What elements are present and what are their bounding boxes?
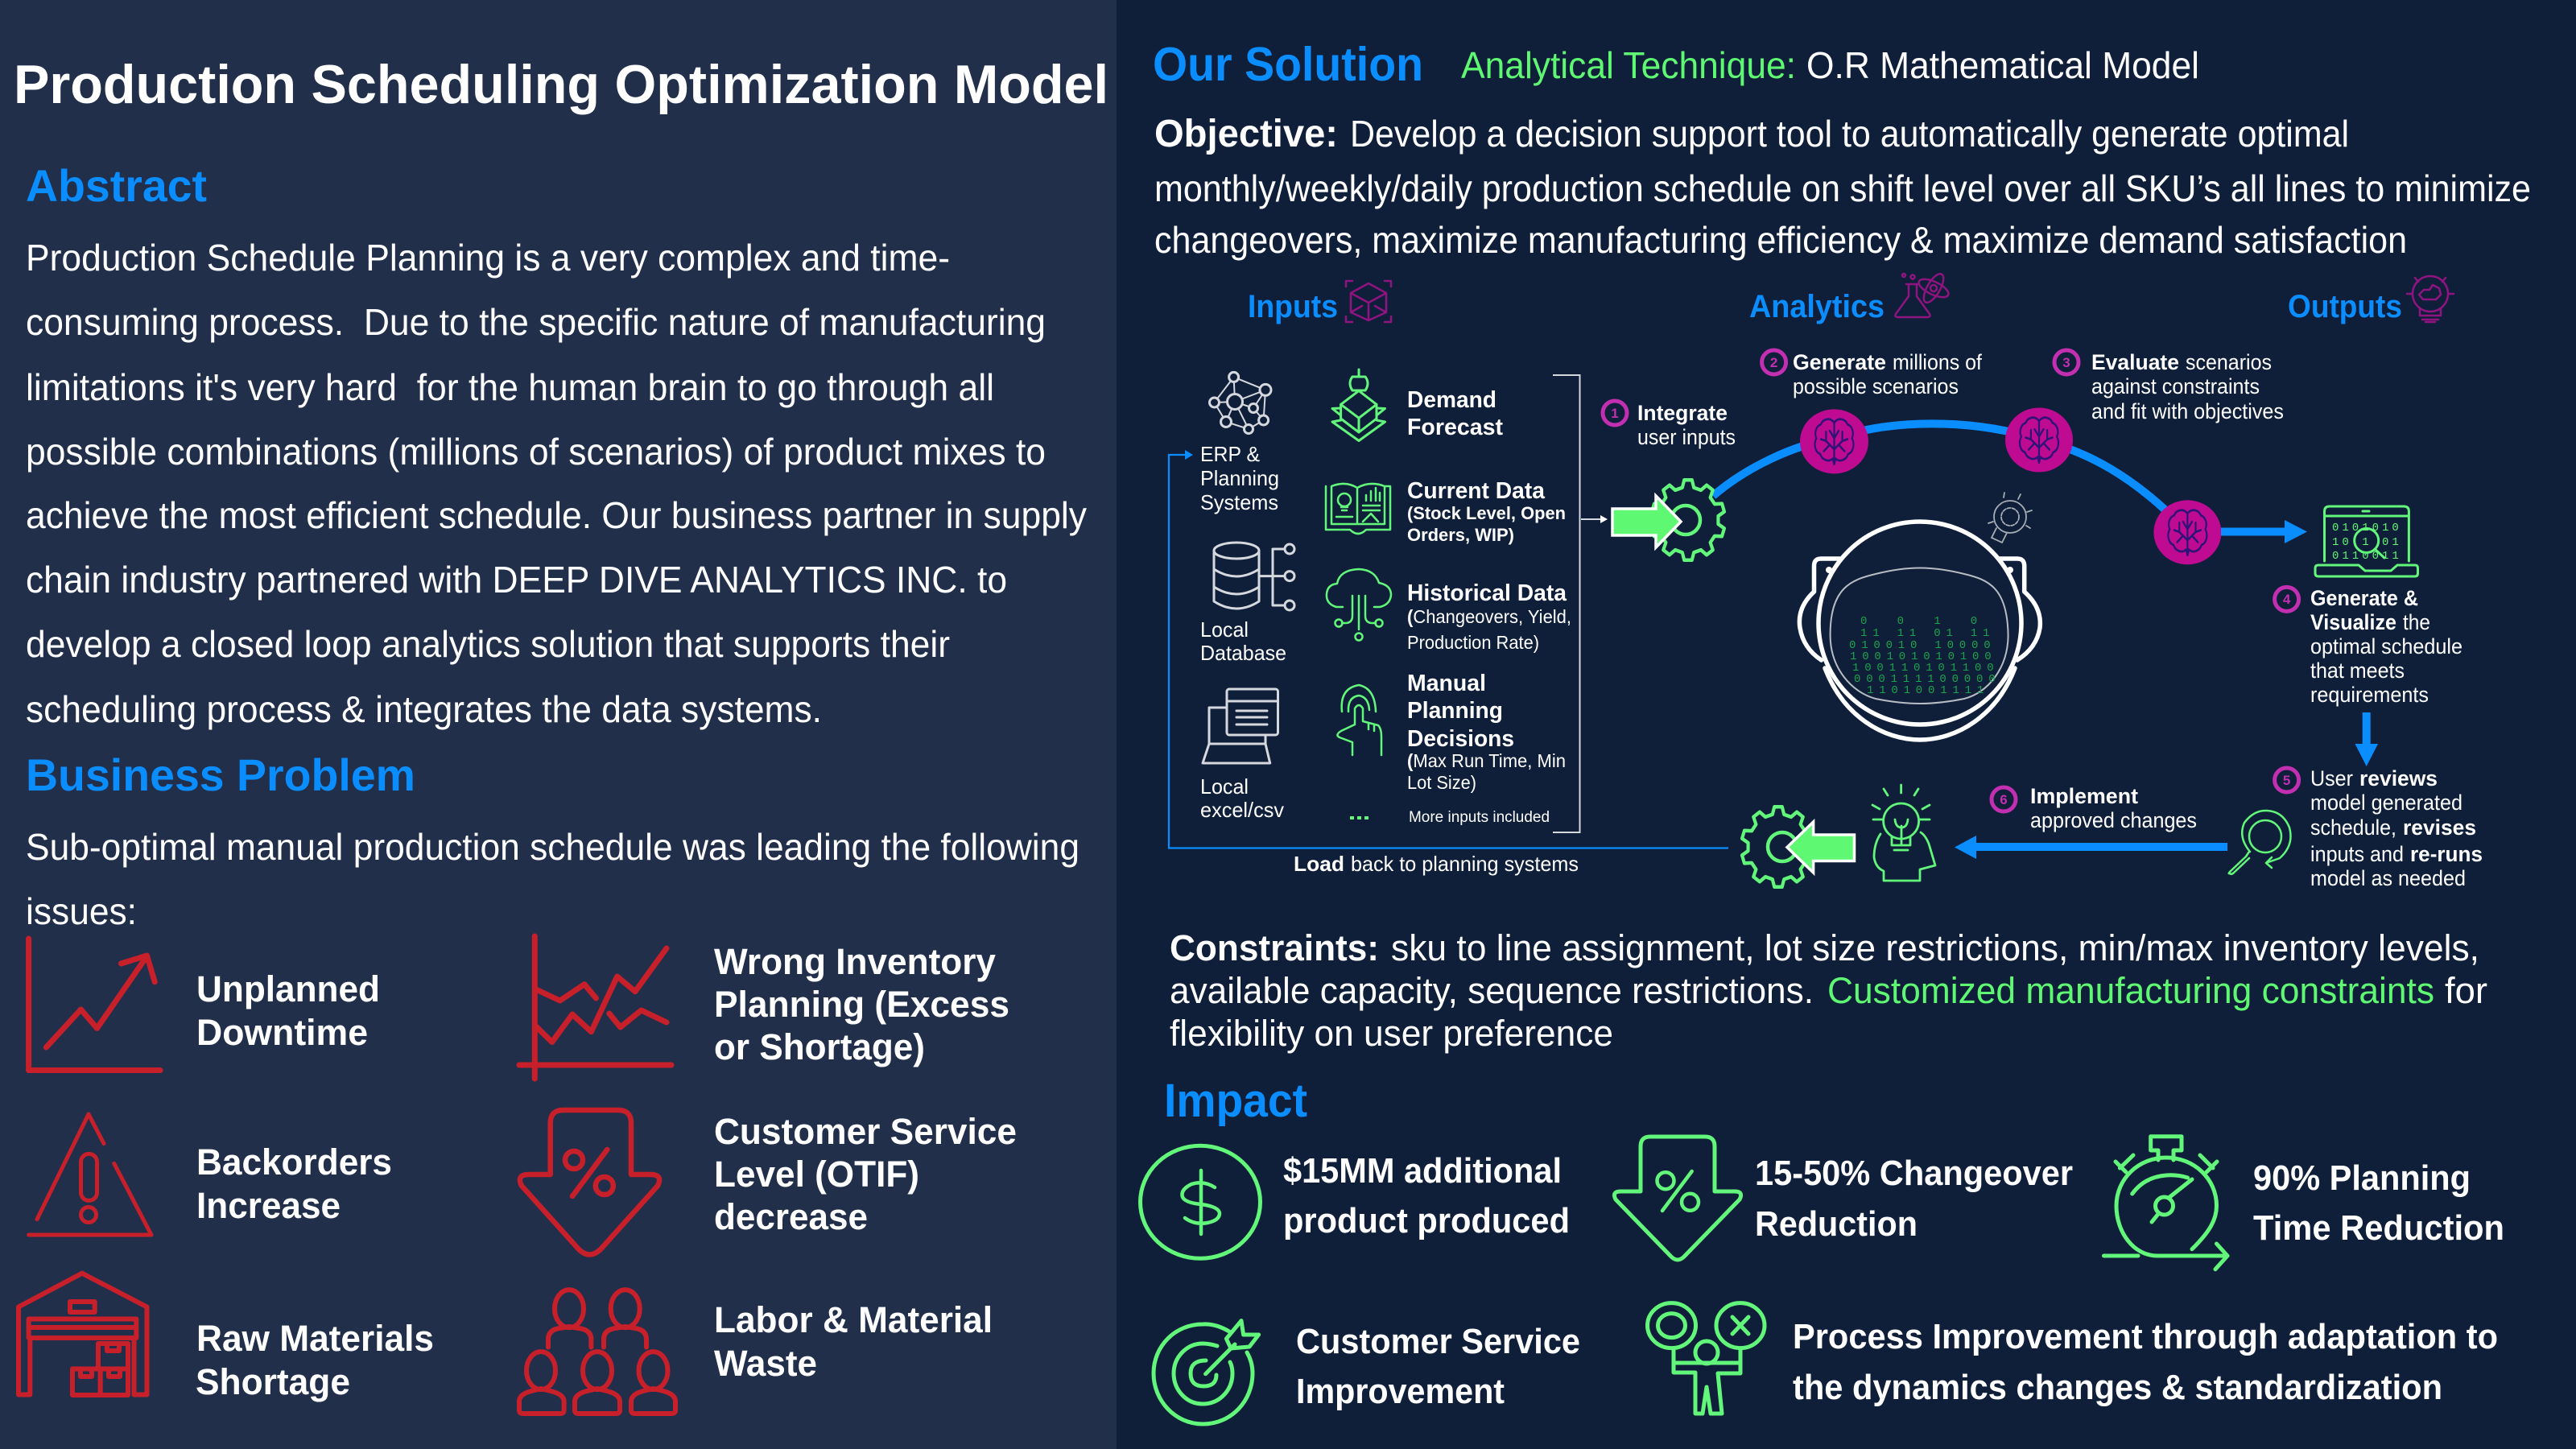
text: ERP and Planning Systems — [1200, 442, 1279, 514]
text: Current Data: (Stock Level, Open — [1407, 503, 1566, 523]
icon: more dots — [1350, 816, 1368, 819]
icon: laptop with binary: 0101010 — [2332, 522, 2402, 535]
step 2: generate: possible scenarios — [1793, 374, 1959, 398]
icon: percent down arrow — [520, 1110, 659, 1254]
arrow: down to review — [2355, 712, 2378, 766]
heading: Abstract: Abstract — [26, 160, 207, 211]
step 5: user reviews: User — [2310, 766, 2353, 791]
text: planning time reduction — [2253, 1158, 2504, 1248]
icon: magnifier loop — [2229, 811, 2291, 874]
step 4: generate and visualize: 4 — [2283, 592, 2291, 607]
step 6: implement — [1992, 784, 2197, 832]
label: Backorders Increase — [196, 1141, 392, 1226]
text: changeover reduction: 15-50% Changeover — [1755, 1154, 2073, 1193]
icon: dollar circle — [1140, 1146, 1261, 1258]
text: Historical Data — [1407, 580, 1571, 653]
step 2: generate: 2 — [1770, 355, 1777, 370]
icon: input gear with arrow — [1612, 470, 1734, 570]
binary stream: 100110101100 — [1852, 662, 1999, 675]
text: Local excel/csv — [1200, 774, 1284, 822]
icon: people group — [519, 1290, 675, 1414]
text: process improvement: Process Improvement through adaptation to — [1793, 1317, 2498, 1356]
binary stream: 000111100000 — [1854, 673, 2000, 686]
text: Demand Forecast: Demand — [1407, 387, 1496, 413]
text block: business problem intro — [26, 826, 1080, 932]
text block: objective: Develop a decision support tool to automatically generate optimal — [1350, 113, 2349, 155]
step 2: generate: millions of — [1893, 350, 1982, 374]
text: analytical technique: Analytical Technique: — [1461, 44, 1796, 86]
icon: stacked boxes forecast — [1332, 369, 1385, 441]
icon: database — [1214, 543, 1294, 610]
binary stream: 1101001111 — [1867, 684, 1989, 697]
label: Labor and Material Waste — [714, 1299, 993, 1384]
label: Raw Materials Shortage: Raw Materials — [196, 1318, 434, 1359]
text: Local Database: Local — [1200, 617, 1249, 642]
text: ERP and Planning Systems: Systems — [1200, 490, 1278, 514]
step 1: integrate — [1603, 401, 1736, 449]
text block: abstract body: chain industry partnered with DEEP DIVE ANALYTICS INC. to — [26, 559, 1007, 601]
text block: constraints: flexibility on user preference — [1170, 1013, 1613, 1054]
label: Labor and Material Waste: Waste — [714, 1343, 817, 1384]
icon: network — [1209, 372, 1271, 433]
bracket with arrow — [1553, 375, 1608, 832]
heading: Inputs: Inputs — [1248, 289, 1338, 324]
text: customer service improvement — [1296, 1322, 1580, 1411]
icon: bulb head — [1872, 785, 1935, 881]
title: Production Scheduling Optimization Model — [14, 54, 1108, 115]
step 4: generate and visualize: that meets — [2310, 658, 2405, 683]
binary stream — [1849, 615, 2000, 697]
label: Customer Service Level: decrease — [714, 1196, 868, 1237]
label: Unplanned Downtime: Downtime — [196, 1012, 368, 1053]
icon: output gear with arrow — [1732, 797, 1855, 897]
text block: constraints — [1170, 927, 2487, 1054]
step 3: evaluate — [2054, 350, 2284, 423]
step 4: generate and visualize: optimal schedule — [2310, 634, 2462, 658]
text block: constraints: Customized manufacturing constraints — [1827, 970, 2434, 1011]
text: Local Database — [1200, 617, 1286, 665]
step 5: user reviews: reviews — [2359, 766, 2438, 791]
step 3: evaluate: Evaluate — [2091, 350, 2179, 374]
label: Wrong Inventory Planning: Planning (Excess — [714, 984, 1009, 1025]
text: customer service improvement: Customer Service — [1296, 1322, 1580, 1361]
text: ERP and Planning Systems: Planning — [1200, 466, 1279, 490]
step 1: integrate: user inputs — [1637, 425, 1736, 449]
heading: Outputs: Outputs — [2288, 289, 2402, 324]
text: Current Data — [1407, 478, 1566, 545]
step 6: implement: Implement — [2030, 784, 2138, 808]
text: Local excel/csv: Local — [1200, 774, 1249, 799]
binary stream: 11 11 01 11 — [1860, 627, 1995, 640]
step 1: integrate: Integrate — [1637, 401, 1728, 425]
text block: business problem intro: Sub-optimal manual production schedule was leading the following — [26, 826, 1080, 868]
step 5: user reviews: revises — [2403, 815, 2476, 840]
text block: abstract body: Production Schedule Planning is a very complex and time- — [26, 237, 950, 279]
binary stream: 0 0 1 0 — [1860, 615, 1983, 628]
icon: flask and atom — [1895, 271, 1951, 317]
text block: constraints: for — [2445, 970, 2487, 1011]
heading: Our Solution: Our Solution — [1153, 38, 1423, 91]
icon: fluctuating chart — [519, 936, 671, 1079]
text block: abstract body: scheduling process & integrates the data systems. — [26, 688, 822, 730]
label: Unplanned Downtime: Unplanned — [196, 968, 380, 1009]
text block: abstract body — [26, 237, 1087, 730]
text block: constraints: Constraints: — [1170, 927, 1379, 968]
text: product produced: $15MM additional — [1283, 1151, 1562, 1191]
heading: Analytics: Analytics — [1749, 289, 1885, 324]
label: Unplanned Downtime — [196, 968, 380, 1053]
icon: brain node 3 — [2153, 500, 2221, 564]
text: Demand Forecast: Forecast — [1407, 415, 1503, 440]
icon: laptop with binary: 10 1 01 — [2332, 536, 2402, 549]
text block: constraints: available capacity, sequence restrictions. — [1170, 970, 1814, 1011]
step 2: generate — [1762, 350, 1982, 398]
step 4: generate and visualize: Visualize — [2310, 610, 2396, 634]
icon: touch hand — [1337, 685, 1381, 755]
panel: right background — [1117, 0, 2576, 1449]
heading: Impact: Impact — [1164, 1075, 1307, 1127]
text: more inputs: More inputs included — [1409, 809, 1550, 826]
text: analytical technique — [1461, 44, 2199, 86]
step 4: generate and visualize: requirements — [2310, 683, 2429, 707]
text: process improvement: the dynamics changes & standardization — [1793, 1368, 2442, 1407]
icon: cloud circuit — [1327, 569, 1391, 641]
illustration: AI helmet — [1799, 493, 2040, 740]
label: Wrong Inventory Planning — [714, 941, 1009, 1067]
step 4: generate and visualize: the — [2403, 610, 2430, 634]
label: Customer Service Level: Level (OTIF) — [714, 1154, 919, 1195]
text: Demand Forecast — [1407, 387, 1503, 440]
icon: data book — [1326, 484, 1390, 534]
label: Backorders Increase: Backorders — [196, 1141, 392, 1183]
text: Manual Planning Decisions: (Max Run Time, Min — [1407, 750, 1566, 771]
text: load back: Load — [1294, 852, 1344, 876]
arrow: load back loop — [1169, 450, 1728, 848]
text block: objective: Objective: — [1154, 113, 1338, 155]
text: product produced: product produced — [1283, 1201, 1570, 1241]
step 5: user reviews — [2275, 766, 2483, 890]
text block: objective: changeovers, maximize manufacturing efficiency & maximize demand satisfaction — [1154, 219, 2407, 261]
step 6: implement: approved changes — [2030, 808, 2197, 832]
icon: rising chart — [29, 939, 160, 1071]
text: Manual Planning Decisions: Lot Size) — [1407, 772, 1476, 793]
label: Customer Service Level — [714, 1111, 1017, 1237]
step 5: user reviews: model generated — [2310, 791, 2462, 815]
text block: business problem intro: issues: — [26, 890, 137, 932]
icon: warehouse — [19, 1274, 147, 1395]
text: Current Data: Current Data — [1407, 478, 1546, 504]
icon: small gear bulb — [1988, 493, 2032, 543]
binary stream: 010010 10000 — [1849, 639, 1996, 652]
text: planning time reduction: Time Reduction — [2253, 1208, 2504, 1248]
text: customer service improvement: Improvement — [1296, 1372, 1505, 1411]
text: process improvement — [1793, 1317, 2498, 1407]
step 5: user reviews: 5 — [2283, 773, 2290, 788]
text block: abstract body: develop a closed loop analytics solution that supports their — [26, 623, 950, 665]
icon: brain node 2 — [2005, 407, 2073, 472]
label: Labor and Material Waste: Labor & Material — [714, 1299, 993, 1340]
label: Customer Service Level: Customer Service — [714, 1111, 1017, 1152]
text: Local excel/csv: excel/csv — [1200, 798, 1284, 822]
label: Raw Materials Shortage: Shortage — [196, 1361, 350, 1402]
arrow: to implement — [1955, 836, 2227, 859]
text block: abstract body: limitations it's very hard for the human brain to go through all — [26, 366, 994, 408]
text: Manual Planning Decisions: Decisions — [1407, 726, 1514, 752]
step 5: user reviews: model as needed — [2310, 866, 2466, 890]
text: Historical Data: Production Rate) — [1407, 632, 1539, 653]
icon: warning triangle — [29, 1114, 151, 1235]
binary stream: 100101010100 — [1850, 650, 1996, 663]
text block: constraints: sku to line assignment, lot size restrictions, min/max inventory levels, — [1391, 927, 2479, 968]
heading: Business Problem: Business Problem — [26, 749, 415, 800]
icon: stopwatch — [2104, 1137, 2227, 1269]
step 1: integrate: 1 — [1611, 406, 1619, 421]
step 6: implement: 6 — [2000, 792, 2008, 807]
arrow: to outputs — [2221, 520, 2307, 543]
text: Manual Planning Decisions: Planning — [1407, 698, 1503, 724]
text: Local Database: Database — [1200, 641, 1286, 665]
icon: laptop with binary: 0110011 — [2332, 550, 2402, 563]
panel: left background — [0, 0, 1117, 1449]
step 5: user reviews: inputs and — [2310, 842, 2404, 866]
text: Historical Data: (Changeovers, Yield, — [1407, 606, 1571, 627]
text block: abstract body: achieve the most efficient schedule. Our business partner in supply — [26, 494, 1087, 536]
text: product produced — [1283, 1151, 1570, 1241]
text block: abstract body: consuming process. Due to the specific nature of manufacturing — [26, 301, 1046, 343]
text: analytical technique: O.R Mathematical Model — [1806, 44, 2199, 86]
step 3: evaluate: scenarios — [2186, 350, 2272, 374]
step 4: generate and visualize: Generate & — [2310, 586, 2418, 610]
step 2: generate: Generate — [1793, 350, 1886, 374]
step 5: user reviews: re-runs — [2410, 842, 2483, 866]
text block: objective — [1154, 113, 2531, 261]
text: planning time reduction: 90% Planning — [2253, 1158, 2471, 1198]
label: Backorders Increase: Increase — [196, 1185, 341, 1226]
step 3: evaluate: and fit with objectives — [2091, 399, 2284, 423]
label: Wrong Inventory Planning: or Shortage) — [714, 1026, 925, 1067]
text: changeover reduction: Reduction — [1755, 1204, 1918, 1244]
text: Manual Planning Decisions: Manual — [1407, 671, 1486, 696]
icon: green percent arrow — [1614, 1137, 1741, 1260]
icon: person holding signs — [1647, 1303, 1765, 1414]
label: Raw Materials Shortage — [196, 1318, 434, 1402]
icon: brain node 1 — [1800, 409, 1868, 473]
arc: analytics path — [1713, 423, 2187, 531]
text: Manual Planning Decisions — [1407, 671, 1566, 793]
text: Current Data: Orders, WIP) — [1407, 525, 1514, 545]
step 5: user reviews: schedule, — [2310, 815, 2396, 840]
icon: computer with window — [1203, 689, 1278, 763]
text: changeover reduction — [1755, 1154, 2073, 1244]
icon: laptop with binary — [2315, 506, 2418, 576]
text: Historical Data: Historical Data — [1407, 580, 1567, 606]
step 3: evaluate: against constraints — [2091, 374, 2260, 398]
text block: abstract body: possible combinations (millions of scenarios) of product mixes to — [26, 431, 1046, 473]
step 3: evaluate: 3 — [2062, 355, 2070, 370]
text: ERP and Planning Systems: ERP & — [1200, 442, 1260, 466]
icon: puzzle bulb — [2407, 276, 2454, 322]
text: load back: back to planning systems — [1351, 852, 1579, 876]
icon: target — [1154, 1321, 1259, 1424]
icon: cube — [1346, 281, 1391, 322]
step 4: generate and visualize — [2275, 586, 2462, 707]
label: Wrong Inventory Planning: Wrong Inventory — [714, 941, 996, 982]
